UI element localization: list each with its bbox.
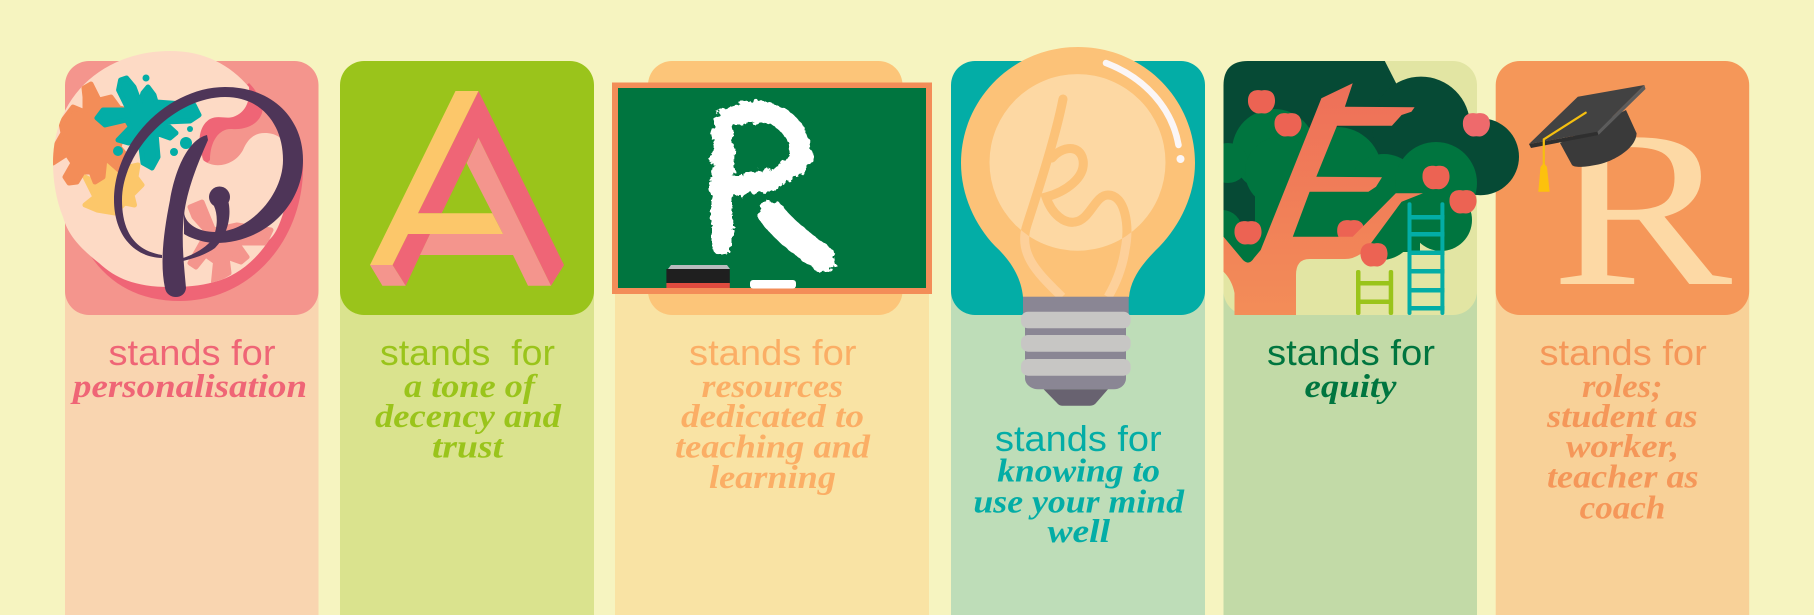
text: resources dedicated to teaching and learning (675, 369, 871, 496)
text: roles; student as worker, teacher as coach: coach (1580, 491, 1665, 527)
column background (340, 200, 594, 615)
script P loop (114, 87, 303, 258)
text: roles; student as worker, teacher as coach: student as (1546, 399, 1698, 435)
text: resources dedicated to teaching and learning: learning (709, 460, 836, 496)
text: roles; student as worker, teacher as coach (1546, 369, 1699, 527)
text: a tone of decency and trust: decency and (375, 399, 562, 435)
panel: A tone of decency and trust (340, 61, 594, 615)
text: resources dedicated to teaching and learning: teaching and (675, 430, 871, 466)
column background (951, 200, 1205, 615)
text: personalisation: personalisation (70, 369, 307, 405)
text: knowing to use your mind well: use your mind (973, 484, 1185, 520)
rounded tile (65, 61, 318, 315)
text: a tone of decency and trust (375, 369, 562, 466)
column background (1496, 200, 1749, 615)
column background (1224, 200, 1477, 615)
icon: impossible letter A (370, 91, 564, 286)
heading: stands for: stands for (1540, 332, 1707, 373)
text: knowing to use your mind well (973, 454, 1185, 550)
heading: stands for: stands for (380, 332, 555, 373)
heading: stands for: stands for (108, 332, 276, 373)
panel: E equity (1202, 61, 1519, 615)
panel: K knowing (951, 47, 1205, 615)
panel: R resources (612, 61, 932, 615)
text: resources dedicated to teaching and learning: resources (702, 369, 843, 405)
text: roles; student as worker, teacher as coach: roles; (1582, 369, 1662, 405)
panel: R roles (1496, 61, 1749, 615)
text: roles; student as worker, teacher as coach: teacher as (1547, 460, 1699, 496)
heading: stands for: stands for (995, 418, 1162, 459)
icon: apple tree letter E with ladders (1202, 61, 1519, 315)
column background (65, 200, 318, 615)
text: resources dedicated to teaching and learning: dedicated to (681, 399, 864, 435)
rounded tile (340, 61, 594, 315)
text: a tone of decency and trust: trust (432, 430, 504, 466)
text: knowing to use your mind well: well (1048, 514, 1111, 550)
rounded tile (951, 61, 1205, 315)
rounded tile (648, 61, 902, 315)
text: a tone of decency and trust: a tone of (404, 369, 538, 405)
column background (615, 250, 929, 615)
icon: paint splash letter P (53, 51, 303, 301)
icon: graduation cap (1529, 85, 1646, 192)
panel: P personalisation (53, 51, 318, 615)
text: roles; student as worker, teacher as coach: worker, (1566, 429, 1679, 465)
icon: light bulb with letter k (961, 47, 1195, 406)
rounded tile (1224, 61, 1477, 315)
text: knowing to use your mind well: knowing to (997, 454, 1160, 490)
icon: chalkboard (612, 82, 932, 294)
rounded tile (1496, 61, 1749, 315)
text: equity: equity (1304, 369, 1397, 405)
heading: stands for: stands for (689, 332, 856, 373)
heading: stands for: stands for (1267, 332, 1435, 373)
letter R: R (1551, 84, 1732, 333)
